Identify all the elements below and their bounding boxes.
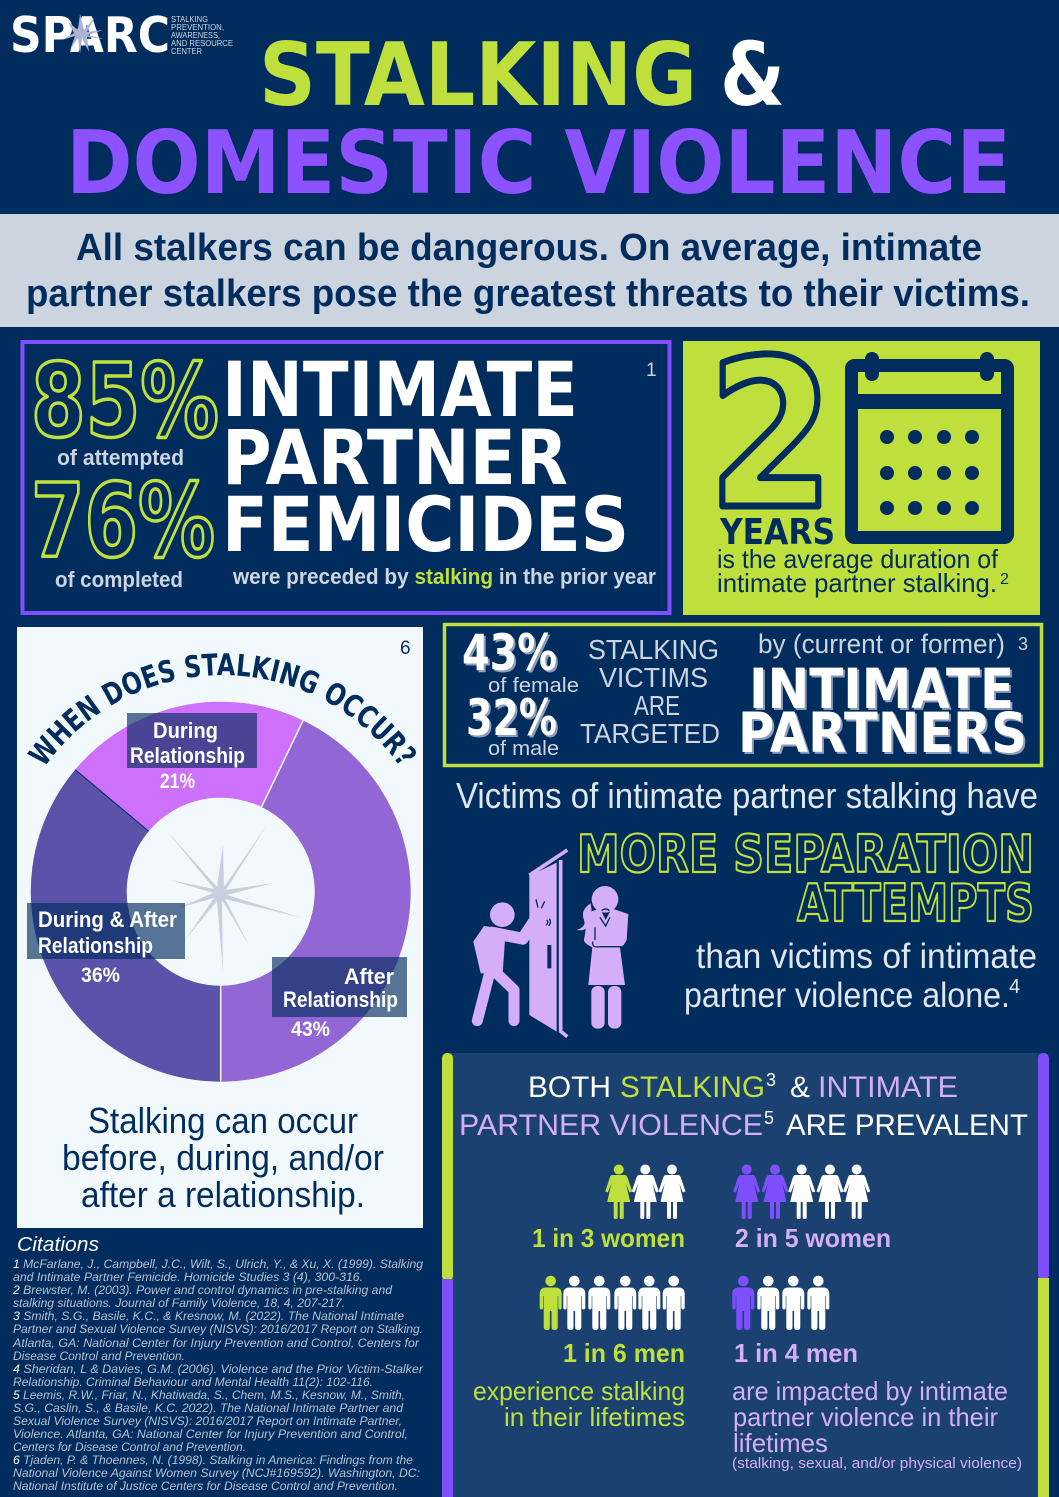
text: impacted by intimate partner violence: partner violence in their bbox=[733, 1402, 998, 1432]
title: & bbox=[720, 24, 785, 126]
logo: SPARC: AWARENESS, bbox=[171, 31, 220, 40]
stat: 76%: 76% bbox=[31, 462, 215, 581]
heading: intimate partner femicides bbox=[222, 345, 629, 569]
citation list: National Institute of Justice Centers for Disease Control and Prevention. bbox=[13, 1481, 398, 1493]
text: stalking can occur bbox=[62, 1100, 384, 1215]
text: stalking victims are targeted: VICTIMS bbox=[599, 662, 708, 693]
heading: both prevalent: PARTNER VIOLENCE bbox=[459, 1109, 763, 1142]
citation list: Sexual Violence Survey (NISVS): 2016/2017 Report on Intimate Partner, bbox=[13, 1416, 402, 1428]
label: years: YEARS bbox=[719, 512, 835, 553]
heading: both prevalent: 5 bbox=[764, 1108, 774, 1128]
label: during relationship: Relationship bbox=[130, 743, 245, 768]
label: during and after relationship: Relationship bbox=[38, 933, 153, 958]
citation list: 2 Brewster, M. (2003). Power and control dynamics in pre-stalking and bbox=[12, 1285, 393, 1297]
logo: SPARC: SPARC bbox=[10, 7, 170, 64]
curved heading: WHEN DOES STALKING OCCUR? bbox=[27, 653, 416, 764]
label: after relationship: Relationship bbox=[283, 987, 398, 1012]
text: experience stalking: experience stalking bbox=[473, 1376, 685, 1406]
citation list bbox=[12, 1259, 424, 1493]
label: during relationship: During bbox=[153, 718, 218, 743]
logo: SPARC: PREVENTION, bbox=[171, 23, 224, 32]
label: during and after relationship: During & After bbox=[38, 907, 177, 932]
citation list: Partner and Sexual Violence Survey (NISVS): 2016/2017 Report on Stalking. bbox=[13, 1324, 423, 1336]
stat: 43% of female: 43% bbox=[462, 624, 557, 682]
text: stalking victims are targeted: STALKING bbox=[588, 634, 719, 665]
title: STALKING bbox=[259, 24, 697, 126]
label: 1 in 4 men: 1 in 4 men bbox=[734, 1338, 858, 1368]
citation list: Relationship. Criminal Behaviour and Mental Health 11(2): 102-116. bbox=[13, 1377, 373, 1389]
heading: intimate partner femicides: INTIMATE bbox=[222, 345, 578, 434]
accent bar left bbox=[442, 1053, 453, 1497]
text: impacted by intimate partner violence bbox=[732, 1376, 1022, 1472]
text: than victims of intimate partner violence alone: partner violence alone. bbox=[684, 976, 1010, 1015]
label: 1 in 6 men: 1 in 6 men bbox=[563, 1338, 685, 1368]
text: average duration: intimate partner stalking. bbox=[717, 568, 997, 598]
icon: man knocking on door and distressed woman bbox=[473, 850, 628, 1037]
title bbox=[66, 24, 1011, 214]
text: experience stalking bbox=[473, 1376, 685, 1432]
panel: when does stalking occur bbox=[17, 627, 423, 1228]
subtitle band bbox=[0, 214, 1059, 327]
panel: intimate partner femicides bbox=[22, 342, 670, 613]
heading: both prevalent: & bbox=[790, 1071, 810, 1104]
citation mark 6: 6 bbox=[400, 638, 411, 659]
stat: 85%: 85% bbox=[31, 342, 219, 461]
heading: both prevalent: BOTH bbox=[528, 1071, 611, 1104]
heading: intimate partners bbox=[738, 657, 1027, 765]
citation list: Centers for Disease Control and Prevention. bbox=[13, 1442, 246, 1454]
citation list: Violence. Atlanta, GA: National Center for Injury Prevention and Control, bbox=[13, 1429, 408, 1441]
heading: intimate partners: PARTNERS bbox=[738, 701, 1027, 765]
heading: both prevalent: INTIMATE bbox=[818, 1071, 958, 1104]
label: 1 in 3 women: 1 in 3 women bbox=[532, 1223, 685, 1253]
citation list: stalking situations. Journal of Family Violence, 18, 4, 207-217. bbox=[13, 1298, 345, 1310]
logo: SPARC: AND RESOURCE bbox=[171, 39, 233, 48]
label: after relationship: After bbox=[344, 964, 394, 989]
citation list: and Intimate Partner Femicide. Homicide Studies 3 (4), 300-316. bbox=[13, 1272, 363, 1284]
label: after relationship bbox=[272, 957, 407, 1041]
heading: intimate partner femicides: FEMICIDES bbox=[222, 480, 629, 569]
text: impacted by intimate partner violence: are impacted by intimate bbox=[732, 1376, 1008, 1406]
stat: 32% of male bbox=[466, 689, 559, 760]
logo: SPARC: CENTER bbox=[171, 47, 202, 56]
accent bar right bbox=[1038, 1053, 1049, 1497]
segment: during relationship 21% bbox=[75, 702, 303, 831]
citation list: Atlanta, GA: National Center for Injury Prevention and Control, Centers for bbox=[12, 1338, 420, 1350]
heading: both prevalent bbox=[459, 1070, 1028, 1142]
man bbox=[473, 902, 536, 1021]
text: than victims of intimate partner violence alone bbox=[684, 937, 1037, 1015]
panel: 2 years bbox=[683, 317, 1040, 615]
donut chart bbox=[31, 702, 411, 1082]
citation list: 1 McFarlane, J., Campbell, J.C., Wilt, S., Ulrich, Y., & Xu, X. (1999). Stalking bbox=[13, 1259, 424, 1271]
heading: more separation attempts bbox=[577, 825, 1034, 934]
label: during relationship: 21% bbox=[160, 770, 195, 793]
label: during and after relationship: 36% bbox=[81, 964, 120, 987]
label: during relationship bbox=[127, 713, 257, 793]
text: stalking can occur: after a relationship. bbox=[81, 1174, 365, 1215]
citation mark 3: 3 bbox=[1018, 634, 1028, 654]
stat: 32% of male: of male bbox=[488, 738, 559, 760]
label: of completed: of completed bbox=[55, 567, 183, 592]
heading: both prevalent: STALKING bbox=[620, 1071, 765, 1104]
stat: 43% of female: of female bbox=[488, 675, 579, 697]
text: stalking victims are targeted: ARE bbox=[634, 690, 680, 721]
text: stalking can occur: before, during, and/or bbox=[62, 1137, 384, 1178]
segment: after relationship 43% bbox=[221, 720, 411, 1082]
stat: 32% of male: 32% bbox=[466, 689, 557, 747]
pictogram: 1 in 3 women bbox=[605, 1164, 686, 1219]
label: during and after relationship bbox=[27, 903, 185, 987]
text: stalking victims are targeted: TARGETED bbox=[580, 718, 720, 749]
door bbox=[529, 850, 567, 1037]
stat: 2: 2 bbox=[708, 317, 834, 555]
citation mark 1: 1 bbox=[646, 360, 657, 381]
citation list: Disease Control and Prevention. bbox=[13, 1351, 185, 1363]
label: of attempted: of attempted bbox=[57, 445, 184, 470]
icon: star bbox=[168, 825, 302, 973]
logo: SPARC: STALKING bbox=[171, 15, 208, 24]
label: 2 in 5 women: 2 in 5 women bbox=[735, 1223, 891, 1253]
text: experience stalking: in their lifetimes bbox=[504, 1402, 685, 1432]
text: impacted by intimate partner violence: (stalking, sexual, and/or physical violence) bbox=[732, 1455, 1022, 1472]
text: preceded by stalking: were preceded by stalking in the prior year bbox=[232, 564, 656, 589]
label: after relationship: 43% bbox=[291, 1018, 330, 1041]
text: than victims of intimate partner violence alone: 4 bbox=[1009, 976, 1020, 998]
pictogram: 1 in 6 men bbox=[540, 1276, 685, 1330]
text: stalking can occur: Stalking can occur bbox=[88, 1100, 358, 1141]
text: average duration: is the average duration of bbox=[717, 544, 999, 574]
segment: during and after 36% bbox=[31, 770, 221, 1082]
citation list: 4 Sheridan, L & Davies, G.M. (2006). Violence and the Prior Victim-Stalker bbox=[13, 1364, 424, 1376]
citations bbox=[12, 1234, 424, 1493]
heading: both prevalent: ARE PREVALENT bbox=[786, 1109, 1028, 1142]
text: impacted by intimate partner violence: lifetimes bbox=[733, 1428, 828, 1458]
subtitle band: partner stalkers pose the greatest threats to their victims. bbox=[26, 273, 1030, 315]
citation list: S.G., Caslin, S., & Basile, K.C. 2022). The National Intimate Partner and bbox=[13, 1403, 404, 1415]
text: average duration bbox=[717, 544, 1009, 598]
citation list: 5 Leemis, R.W., Friar, N., Khatiwada, S., Chem, M.S., Kesnow, M., Smith, bbox=[13, 1390, 405, 1402]
citation list: National Violence Against Women Survey (NCJ#169592). Washington, DC: bbox=[13, 1468, 420, 1480]
subtitle band: All stalkers can be dangerous. On average, intimate bbox=[76, 227, 982, 269]
heading: intimate partner femicides: PARTNER bbox=[222, 413, 568, 502]
pictogram: 1 in 4 men bbox=[732, 1276, 829, 1330]
text: average duration: 2 bbox=[1000, 571, 1009, 588]
text: stalking victims are targeted bbox=[580, 634, 720, 749]
icon: calendar bbox=[852, 352, 1008, 538]
woman bbox=[577, 886, 628, 1029]
panel: targeted by intimate partners bbox=[444, 624, 1042, 766]
heading: citations: Citations bbox=[17, 1234, 99, 1256]
panel: prevalence bbox=[442, 1053, 1049, 1497]
citation list: 3 Smith, S.G., Basile, K.C., & Kresnow, M. (2022). The National Intimate bbox=[13, 1311, 404, 1323]
heading: intimate partners: INTIMATE bbox=[749, 657, 1014, 721]
text: than victims of intimate partner violence alone: than victims of intimate bbox=[696, 937, 1037, 976]
pictogram: 2 in 5 women bbox=[733, 1164, 870, 1219]
citation list: 6 Tjaden, P. & Thoennes, N. (1998). Stalking in America: Findings from the bbox=[13, 1455, 413, 1467]
text: by current or former: by (current or former) bbox=[758, 629, 1005, 659]
heading: both prevalent: 3 bbox=[766, 1070, 776, 1090]
